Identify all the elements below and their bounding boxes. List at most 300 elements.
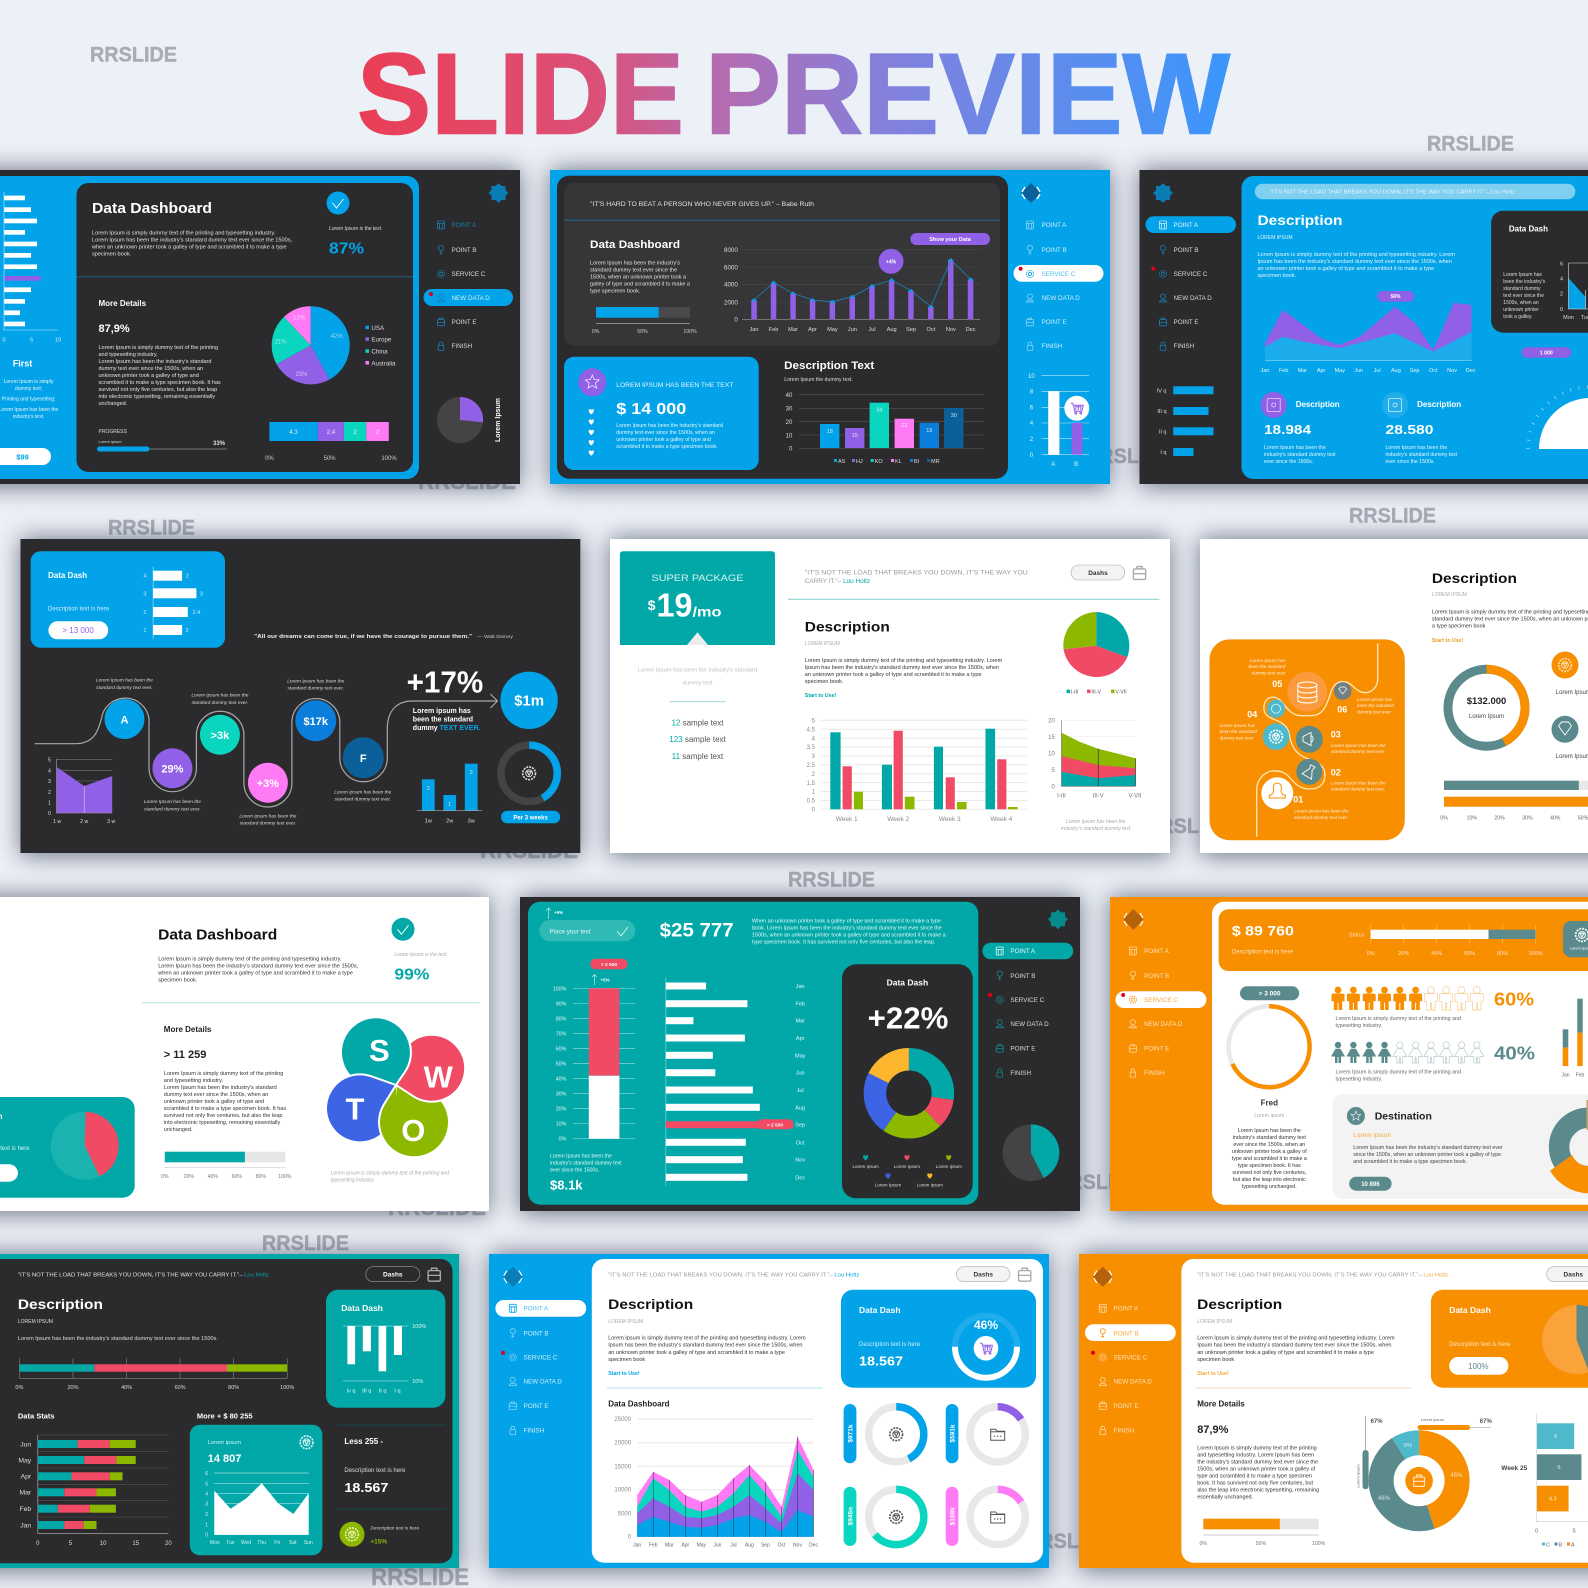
ring stat 3 xyxy=(844,1487,924,1546)
navigation menu: POINT E xyxy=(1114,1403,1139,1410)
more details block: and typesetting industry. Lorem Ipsum has been xyxy=(1197,1452,1314,1458)
blue data dash card: 2 xyxy=(186,628,189,634)
stat 87%: 87% xyxy=(329,240,364,258)
column chart: 34 xyxy=(876,408,882,414)
more details block: type and scrambled it to make a type specimen xyxy=(1197,1473,1312,1479)
heading: Data Dashboard xyxy=(92,200,212,217)
logo xyxy=(1048,909,1068,929)
blue data dash card: 3 xyxy=(200,591,203,597)
heading and text xyxy=(590,239,691,294)
description block: Start to Use! xyxy=(1197,1371,1229,1377)
navigation menu: POINT A xyxy=(1010,948,1036,955)
left note and value: $8.1k xyxy=(550,1178,583,1192)
SWOT diagram: T xyxy=(346,1092,365,1126)
more details block: essentially unchanged. xyxy=(1197,1494,1254,1500)
stacked area chart: 0 xyxy=(628,1535,632,1541)
column chart: 2.5 xyxy=(807,763,816,769)
navigation menu: POINT A xyxy=(1114,1306,1139,1312)
description block xyxy=(18,1296,218,1342)
stacked progress bar xyxy=(15,1358,294,1391)
vertical percent bar: 30% xyxy=(556,1092,567,1098)
description block: LOREM IPSUM xyxy=(1197,1319,1232,1325)
donut callout left: Lorem ipsum xyxy=(1356,1464,1360,1488)
line bar chart: 4000 xyxy=(724,282,738,289)
blue data dash card: 2 xyxy=(143,610,146,616)
stacked bar: 2 xyxy=(353,430,357,436)
stat 87%: Lorem Ipsum is the text. xyxy=(329,226,382,232)
process captions: been the standard xyxy=(1220,729,1257,734)
orange process card xyxy=(1210,639,1405,840)
step 01: 01 xyxy=(1293,794,1303,804)
caption: typesetting industry. xyxy=(331,1177,375,1183)
dark data dash card: been the industry's xyxy=(1503,279,1546,285)
navigation menu: POINT B xyxy=(452,247,477,254)
quote: "IT'S NOT THE LOAD THAT BREAKS YOU DOWN, IT'S THE WAY YOU CARRY IT."– Lou Holtz xyxy=(608,1272,859,1278)
teal area chart card: 1 xyxy=(205,1522,208,1528)
navigation menu: POINT B xyxy=(1010,973,1035,980)
dark data dash card: text ever since the xyxy=(1503,293,1544,299)
column chart: KO xyxy=(875,459,883,465)
description block: Description xyxy=(608,1296,693,1312)
intro text: Lorem Ipsum is simply dummy text of the printing and typesetting industry. xyxy=(92,230,276,236)
description block: Lorem Ipsum has been the industry's standard dummy text ever since the 1500s. xyxy=(18,1336,218,1342)
monthly horizontal bars: Apr xyxy=(796,1036,805,1042)
orange header panel: $ 89 760 xyxy=(1232,922,1294,938)
badge 1 000: 1 000 xyxy=(1540,350,1553,356)
watermarks: RRSLIDE xyxy=(480,837,578,864)
more details block: Lorem Ipsum has been the industry's standard xyxy=(164,1085,277,1091)
more details block xyxy=(164,1025,286,1133)
navigation menu: SERVICE C xyxy=(452,271,486,278)
description block: Start to Use! xyxy=(1432,638,1464,644)
column chart: 20 xyxy=(786,420,793,426)
stacked area chart: Dec xyxy=(809,1542,818,1548)
blue price card: scrambled it to make a type specimen book. xyxy=(616,444,718,450)
stacked area chart: 20 xyxy=(1048,718,1055,724)
orange data dash card: Description text is here xyxy=(1449,1342,1511,1348)
stacked area chart: III-V xyxy=(1093,794,1104,800)
blue price card: $ 14 000 xyxy=(616,401,686,418)
pie chart: I-III xyxy=(1071,690,1078,696)
dark data dash card: standard dummy xyxy=(1503,286,1541,292)
column chart: 2 xyxy=(812,772,816,778)
people stat 60%: 60% xyxy=(1494,990,1534,1010)
navigation menu xyxy=(1116,947,1206,1077)
column chart: 1 xyxy=(812,790,816,796)
teal pie card xyxy=(0,1097,135,1198)
people stat 40%: 40% xyxy=(1494,1044,1535,1064)
line bar chart: Nov xyxy=(946,327,956,333)
area chart: Oct xyxy=(1429,368,1438,374)
package card: /mo xyxy=(692,604,722,620)
stacked area chart: Data Dashboard xyxy=(608,1400,670,1408)
stat 99% xyxy=(394,952,448,984)
monthly horizontal bars: Aug xyxy=(795,1105,805,1111)
left note and value: ever since the 1500s. xyxy=(550,1168,599,1174)
monthly horizontal bars: Jan xyxy=(796,984,805,990)
slide 1: blue dark data dashboard xyxy=(0,170,520,484)
data stats bars: 15 xyxy=(132,1541,140,1547)
data stats bars: Mar xyxy=(19,1490,32,1497)
description block: an unknown printer took a galley of type and scrambled it to make a type xyxy=(608,1350,785,1356)
small pie xyxy=(437,397,483,443)
stat: 28.580: ever since the 1500s. xyxy=(1386,459,1435,465)
area chart: 56% xyxy=(1390,294,1401,300)
small bar chart: 1 xyxy=(448,802,451,808)
process step F: F xyxy=(360,753,367,765)
navigation menu xyxy=(1146,216,1236,350)
navigation menu: NEW DATA D xyxy=(524,1378,562,1386)
dark data dash card: 0 xyxy=(1560,307,1563,313)
donut chart xyxy=(1378,1443,1463,1519)
navigation menu xyxy=(495,1300,586,1435)
stat: 18.984 xyxy=(1261,392,1340,465)
line bar chart: Jun xyxy=(848,327,857,333)
more details block: also the leap into electronic typesetting, remaining xyxy=(1197,1487,1319,1493)
small bar chart: 2 xyxy=(1030,437,1034,443)
more details block: dummy text ever since the 1500s, when an xyxy=(164,1092,268,1098)
small bar chart xyxy=(417,764,482,824)
intro text: When an unknown printer took a galley of type and scrambled it to make a type xyxy=(752,918,941,924)
more details block: into electronic typesetting, remaining essentially xyxy=(98,394,215,400)
line bar chart: 2000 xyxy=(724,299,738,306)
intro text: Lorem Ipsum has been the industry's standard dummy text ever since the 1500s, xyxy=(92,238,293,244)
dark data dash card: Lorem Ipsum has xyxy=(1503,272,1542,278)
area chart: Nov xyxy=(1447,368,1457,374)
slide 7: white SWOT xyxy=(0,897,489,1211)
line bar chart xyxy=(724,247,980,333)
more details block: More Details xyxy=(1197,1400,1245,1408)
description block: LOREM IPSUM xyxy=(805,641,840,647)
pie legend xyxy=(366,325,396,367)
small bar chart: 3w xyxy=(468,818,475,824)
stacked progress bar: 100% xyxy=(280,1385,294,1391)
navigation menu: POINT B xyxy=(1174,247,1199,254)
more details block: unchanged. xyxy=(164,1127,193,1133)
more details block: 1500s, when an unknown printer took a galley of xyxy=(1197,1466,1316,1472)
left horizontal bar chart xyxy=(2,192,61,344)
monthly horizontal bars: > 2 500 xyxy=(767,1122,783,1128)
donut progress xyxy=(501,745,557,802)
white main panel xyxy=(1181,1259,1588,1563)
package description xyxy=(638,668,757,686)
navigation menu: NEW DATA D xyxy=(1174,295,1212,302)
blue data dash card xyxy=(841,1290,1036,1388)
more value heading: More + $ 80 255 xyxy=(197,1412,253,1420)
teal data dash card: 100% xyxy=(412,1324,426,1330)
more details block: Lorem Ipsum is simply dummy text of the printing xyxy=(1197,1445,1317,1451)
navigation menu: FINISH xyxy=(1042,343,1063,350)
left text block: First xyxy=(0,358,59,420)
more details block: scrambled it to make a type specimen book. It has xyxy=(164,1106,286,1112)
teal area chart card: 0 xyxy=(205,1533,208,1539)
big stat +17%: Lorem ipsum has xyxy=(413,708,471,715)
mini stacked bars xyxy=(1561,999,1585,1078)
small area chart: 2 xyxy=(48,790,51,796)
dark main panel xyxy=(0,1259,452,1563)
icon: check badge xyxy=(392,918,414,941)
package card: 19 xyxy=(656,587,692,624)
process captions: standard dummy text ever. xyxy=(96,685,153,691)
stacked bar: 100% xyxy=(381,456,397,462)
line bar chart: Dec xyxy=(966,327,976,333)
badge +4%: +4% xyxy=(886,259,897,265)
package description: dummy text xyxy=(683,680,713,686)
line bar chart: Apr xyxy=(808,327,817,333)
vertical percent bar: > 2 500 xyxy=(601,962,617,968)
stat: 18.984: 18.984 xyxy=(1264,422,1312,437)
horizontal progress bars: 50% xyxy=(1578,816,1588,822)
teal area chart card: 14 807 xyxy=(208,1453,241,1465)
stacked progress bar: 20% xyxy=(67,1385,79,1391)
teal data dash card: III q xyxy=(362,1388,371,1394)
donut legend: Lorem Ipsum xyxy=(894,1164,920,1169)
monthly horizontal bars: Oct xyxy=(796,1140,805,1146)
more details block: book. It has survived not only five centuries, but xyxy=(1197,1480,1314,1486)
horizontal progress bars: 0% xyxy=(1440,816,1448,822)
person profile: industry's standard dummy text xyxy=(1233,1135,1306,1141)
description block: Description xyxy=(1432,570,1517,586)
teal data dash card xyxy=(326,1290,445,1408)
intro text: specimen book. xyxy=(158,978,198,984)
navigation menu: POINT B xyxy=(1144,973,1169,980)
column chart: KL xyxy=(895,459,902,465)
person profile: typesetting unchanged. xyxy=(1242,1184,1297,1190)
intro text: Lorem Ipsum is simply dummy text of the printing and typesetting industry. xyxy=(158,957,342,963)
dark data dash card xyxy=(842,964,973,1198)
orange header panel: Status xyxy=(1349,932,1365,938)
description block: an unknown printer took a galley of type and scrambled it to make a type xyxy=(1197,1350,1374,1356)
ring stat 4: $188k xyxy=(949,1507,956,1525)
navigation menu xyxy=(424,221,513,350)
stacked area chart: Oct xyxy=(778,1542,786,1548)
column chart: 10 xyxy=(786,433,793,439)
description block xyxy=(608,1296,806,1377)
stacked area chart: 25000 xyxy=(614,1417,632,1423)
orange header panel: 0% xyxy=(1367,951,1375,957)
more details block: unknown printer took a galley of type and xyxy=(98,373,199,379)
teal data dash card: II q xyxy=(379,1388,386,1394)
column chart: 30 xyxy=(786,406,793,412)
description block: Lorem Ipsum is simply dummy text of the printing and typesetting industry. Lorem xyxy=(608,1336,806,1342)
price pill xyxy=(0,448,51,465)
donut callout top: 67% xyxy=(1480,1419,1492,1425)
button: show your data: Show your Data xyxy=(929,237,972,243)
person profile: type specimen book. It has xyxy=(1238,1163,1301,1169)
description block: Ipsum has been the industry's standard dummy text ever since the 1500s, when xyxy=(608,1343,802,1349)
small area chart: 0 xyxy=(48,811,51,817)
big stat +17%: dummy TEXT EVER. xyxy=(413,725,480,732)
data stats bars: 20 xyxy=(165,1541,172,1547)
more details block: unknown printer took a galley of type and xyxy=(164,1099,264,1105)
blue data dash card: > 13 000 xyxy=(62,626,94,635)
process captions: standard dummy text ever. xyxy=(1331,786,1385,791)
process step >3k xyxy=(200,715,240,755)
heading: an unknown printer took a galley of type and scrambled it to make a type xyxy=(1258,266,1434,272)
navigation menu: NEW DATA D xyxy=(1144,1021,1183,1028)
column chart: AS xyxy=(838,459,846,465)
dark data dash card: 6 xyxy=(1560,262,1563,268)
button: show your data xyxy=(910,233,990,245)
blue data dash card: Description text is here xyxy=(859,1342,921,1348)
small bar chart: 2 xyxy=(427,786,430,792)
slide 3: dark frame, blue description panel xyxy=(1140,170,1588,484)
data stats bars: Apr xyxy=(21,1474,32,1481)
growth stat: +15% xyxy=(370,1538,387,1546)
more details block: the industry's standard dummy text ever since the xyxy=(1197,1459,1318,1465)
left horizontal bar chart: 5 xyxy=(30,338,33,344)
navigation menu: SERVICE C xyxy=(1114,1354,1148,1362)
navigation menu xyxy=(982,943,1073,1077)
person profile: unknown printer took a galley of xyxy=(1232,1149,1307,1155)
slide 9: orange frame people stats xyxy=(1110,897,1588,1211)
donut legend: Lorem Ipsum xyxy=(875,1182,901,1188)
vertical percent bar: 20% xyxy=(556,1107,567,1113)
column chart: 19 xyxy=(926,428,932,434)
white main panel xyxy=(1212,902,1588,1205)
process step >3k: >3k xyxy=(211,730,230,742)
column chart: 3.5 xyxy=(807,745,816,751)
upper lighter panel xyxy=(564,183,1000,346)
progress bar: 80% xyxy=(256,1174,266,1180)
donut chart: 46% xyxy=(1378,1496,1391,1502)
stat: 28.580: 28.580 xyxy=(1386,422,1434,437)
slide 10: teal frame dark panel xyxy=(0,1254,459,1568)
blue price card: Lorem Ipsum has been the industry's standard xyxy=(616,423,723,429)
left note and value xyxy=(550,1154,622,1192)
horizontal progress bars: 40% xyxy=(1550,816,1561,822)
teal area chart card xyxy=(190,1425,322,1555)
slide 11: blue frame white panel rings xyxy=(489,1254,1049,1568)
process captions: standard dummy text ever. xyxy=(144,806,201,812)
data stats bars: Jan xyxy=(20,1522,31,1530)
growth stat: Description text is here xyxy=(370,1526,420,1532)
SWOT diagram xyxy=(326,1017,465,1157)
process captions: standard dummy text ever. xyxy=(192,700,248,706)
stacked area chart: Nov xyxy=(793,1542,802,1548)
more details block xyxy=(98,299,221,407)
process captions: standard dummy text ever. xyxy=(287,686,344,692)
teal area chart card: 2 xyxy=(205,1512,208,1518)
monthly horizontal bars: Mar xyxy=(795,1019,805,1025)
blue data dash card: 46% xyxy=(974,1318,998,1332)
small area chart: 5 xyxy=(48,758,51,764)
navigation menu: POINT E xyxy=(524,1403,549,1410)
column chart: 0 xyxy=(812,808,816,814)
heading and text: Lorem Ipsum has been the industry's xyxy=(590,260,680,266)
stacked bar xyxy=(265,422,397,462)
package card: SUPER PACKAGE xyxy=(652,573,744,584)
person profile: ever since the 1500s, when an xyxy=(1233,1142,1305,1148)
process captions: Lorem Ipsum has xyxy=(1357,697,1393,702)
pie chart: 12% xyxy=(293,316,306,322)
ring stat 1 xyxy=(844,1404,924,1463)
monthly horizontal bars xyxy=(666,977,806,1186)
left text block: First: dummy text; xyxy=(15,386,42,392)
process captions: standard dummy text ever. xyxy=(1331,749,1385,754)
vertical percent bar: 80% xyxy=(556,1016,567,1022)
teal data dash card: Data Dash xyxy=(341,1303,383,1313)
column chart: 0.5 xyxy=(807,799,816,805)
navigation menu: POINT A xyxy=(1042,222,1067,229)
person profile: but also the leap into electronic xyxy=(1233,1177,1306,1183)
arrow +5% xyxy=(546,908,563,919)
intro text: 1500s, when an unknown printer took a galley of type and scrambled it to make a xyxy=(752,932,946,938)
intro text: specimen book. xyxy=(92,252,132,258)
step 06: 06 xyxy=(1337,704,1347,714)
stacked area chart: Lorem Ipsum has been the xyxy=(1066,819,1126,825)
dashs button xyxy=(366,1267,420,1282)
watermarks: RRSLIDE xyxy=(90,44,177,66)
line bar chart: 0 xyxy=(734,317,738,324)
people stat 60% xyxy=(1332,987,1534,1029)
navigation menu: POINT E xyxy=(1010,1046,1035,1052)
quote: "IT'S NOT THE LOAD THAT BREAKS YOU DOWN, IT'S THE WAY YOU CARRY IT."– Lou Holtz xyxy=(18,1272,269,1278)
column chart: 22 xyxy=(901,423,907,429)
stacked progress bar: 40% xyxy=(121,1385,132,1391)
column chart: Week 2 xyxy=(887,816,910,823)
navigation menu: POINT B xyxy=(524,1330,549,1338)
teal data dash card: 10% xyxy=(412,1379,423,1385)
slide 12: orange frame white panel donut xyxy=(1079,1254,1588,1568)
pie chart: 25% xyxy=(295,372,308,378)
navigation menu: POINT A xyxy=(1174,222,1199,229)
process captions: been the standard xyxy=(1248,664,1286,669)
week bar chart: 4.3 xyxy=(1549,1496,1557,1502)
week bar chart xyxy=(1501,1413,1588,1548)
$1m badge xyxy=(500,672,558,729)
vertical percent bar: 60% xyxy=(556,1046,567,1052)
people stat 60%: typesetting industry. xyxy=(1336,1023,1382,1029)
column chart: BI xyxy=(914,459,920,465)
dark data dash card: +22% xyxy=(868,1000,948,1035)
heading and text: Data Dashboard xyxy=(590,239,680,251)
navigation menu: SERVICE C xyxy=(1144,997,1178,1004)
orange header panel: 60% xyxy=(1464,951,1475,957)
monthly horizontal bars: Jul xyxy=(797,1088,804,1094)
stacked bar: 2 xyxy=(376,430,380,436)
stat: 28.580: Lorem Ipsum has been the xyxy=(1386,445,1447,451)
description heading xyxy=(784,360,875,383)
watermarks: RRSLIDE xyxy=(108,516,195,540)
dashs button: Dashs xyxy=(383,1272,403,1279)
quarter bars: I q xyxy=(1160,450,1166,456)
small bar chart: 10 xyxy=(1028,374,1035,380)
process captions: standard dummy text ever xyxy=(1294,815,1348,820)
process captions: been the standard xyxy=(1357,703,1394,708)
navigation menu: POINT B xyxy=(1114,1330,1139,1338)
week bar chart: 0 xyxy=(1535,1528,1538,1534)
week bar chart: A xyxy=(1571,1542,1575,1548)
ring stat 4 xyxy=(946,1487,1025,1546)
slide 4: dark process snake xyxy=(20,539,580,853)
pie chart xyxy=(272,306,350,384)
description block: specimen book xyxy=(608,1357,645,1363)
column chart: 40 xyxy=(786,393,793,399)
description block: Description xyxy=(1197,1296,1282,1312)
watermarks: RRSLIDE xyxy=(1145,815,1232,838)
quote: "All our dreams can come true, if we have the courage to pursue them." xyxy=(254,634,472,640)
orange data dash card xyxy=(1431,1290,1588,1388)
stacked area chart: I-III xyxy=(1057,794,1066,800)
process step A xyxy=(104,699,144,739)
stacked bar: 4.3 xyxy=(289,430,298,436)
dark main panel xyxy=(557,176,1008,479)
line bar chart: 8000 xyxy=(724,247,738,254)
progress bar: Lorem ipsum xyxy=(98,439,122,444)
orange header panel: 80% xyxy=(1497,951,1508,957)
horizontal progress bars xyxy=(1440,781,1588,822)
